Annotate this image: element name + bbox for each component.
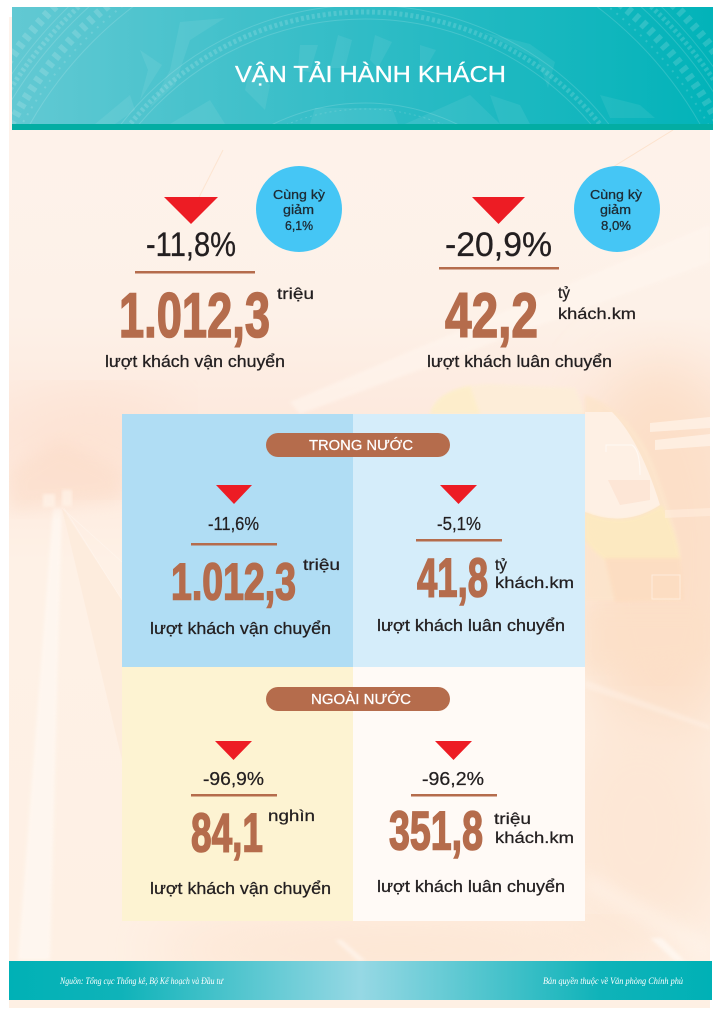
badge: same period: Cùng kỳ [590,187,643,202]
unit: triệu [494,811,531,828]
unit [558,285,636,323]
percent change: -96,9% [203,769,264,789]
icon: down triangle [164,197,218,224]
percent change: -5,1% [437,514,481,534]
unit [495,557,574,592]
panel: foreign passengers [122,667,353,921]
stat: domestic passenger-km [377,485,574,635]
stat: foreign passenger-km [377,741,574,896]
caption: lượt khách luân chuyển [377,616,565,635]
percent change: -20,9% [445,226,552,264]
icon: down triangle [440,485,477,504]
badge: same period: Cùng kỳ [273,187,326,202]
percent change: -11,8% [146,226,236,264]
big number: 41,8 [417,546,488,608]
badge: same period: 6,1% [285,218,313,233]
copyright note: Bản quyền thuộc về Văn phòng Chính phủ [543,976,683,986]
footer bar [9,961,712,1000]
heading pill: foreign [266,687,450,711]
panel: domestic passengers [122,414,353,667]
badge: same period [574,166,660,252]
icon: down triangle [215,741,252,760]
caption: lượt khách luân chuyển [427,352,612,371]
big number: 1.012,3 [171,554,296,612]
icon: down triangle [435,741,472,760]
stat: foreign passengers [150,741,331,898]
heading pill: foreign: NGOÀI NƯỚC [311,691,411,708]
caption: lượt khách luân chuyển [377,877,565,896]
stat: passengers carried (left) [105,166,342,371]
panel: foreign passenger-km [353,667,585,921]
unit: triệu [303,557,340,574]
source note: Nguồn: Tổng cục Thống kê, Bộ Kế hoạch và Đầu tư [59,976,224,986]
unit: triệu [277,286,314,303]
big number: 84,1 [191,802,263,864]
badge: same period: giảm [283,202,314,217]
heading pill: domestic: TRONG NƯỚC [309,437,413,454]
stat: passenger-km (right) [427,166,660,371]
unit: nghìn [268,808,315,825]
unit: tỷ [495,557,507,574]
big number: 42,2 [445,281,538,351]
unit: khách.km [495,830,574,847]
drum pattern [12,7,713,124]
unit [494,811,574,847]
caption: lượt khách vận chuyển [150,619,331,638]
train front [430,386,710,600]
header banner [12,7,713,130]
percent change: -11,6% [208,514,259,534]
unit: khách.km [495,575,574,592]
caption: lượt khách vận chuyển [105,352,285,371]
unit: tỷ [558,285,570,302]
badge: same period: 8,0% [601,218,631,233]
heading pill: domestic [266,433,450,457]
percent change: -96,2% [422,769,484,789]
badge: same period: giảm [600,202,631,217]
title: VẬN TẢI HÀNH KHÁCH [235,59,506,87]
icon: down triangle [216,485,252,504]
stat: domestic passengers [150,485,340,638]
header bottom band [12,124,713,130]
panel: domestic passenger-km [353,414,585,667]
big number: 1.012,3 [119,281,270,351]
unit: khách.km [558,306,636,323]
big number: 351,8 [389,800,483,862]
badge: same period [256,166,342,252]
caption: lượt khách vận chuyển [150,879,331,898]
icon: down triangle [472,197,525,224]
